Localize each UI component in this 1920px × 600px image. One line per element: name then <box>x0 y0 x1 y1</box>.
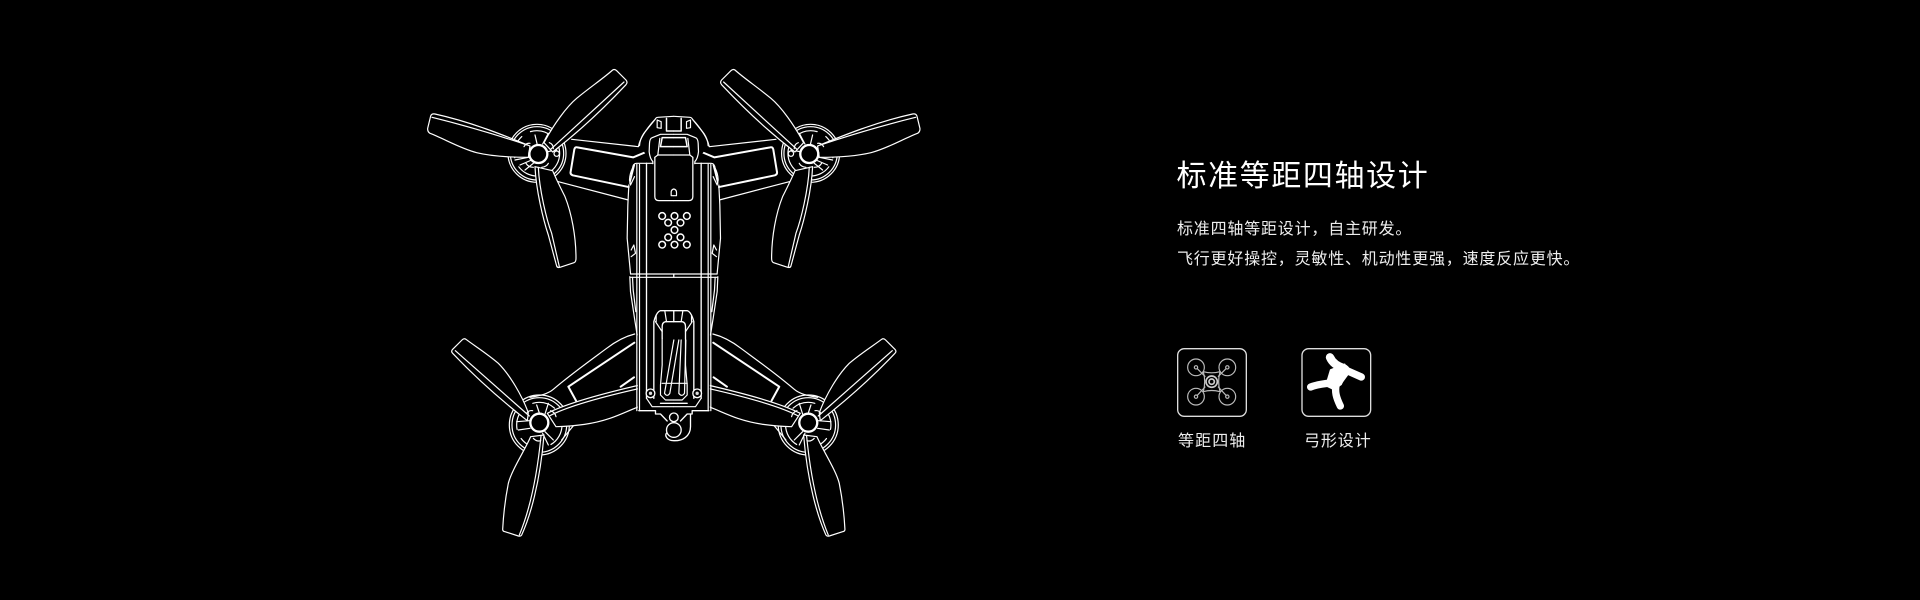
front-right arm and propeller <box>692 69 920 267</box>
label: equidistant quadcopter: 等距四轴 <box>1178 433 1246 450</box>
description line 2: 飞行更好操控，灵敏性、机动性更强，速度反应更快。 <box>1177 250 1580 268</box>
icon: bow-shaped design <box>1302 349 1371 416</box>
rear-left arm and propeller <box>452 334 641 536</box>
front-left arm and propeller <box>428 69 656 267</box>
icon: equidistant quadcopter <box>1178 349 1246 416</box>
title: 标准等距四轴设计 <box>1176 160 1429 192</box>
drone central body <box>627 115 720 442</box>
description line 1: 标准四轴等距设计，自主研发。 <box>1177 220 1412 238</box>
label: bow-shaped design: 弓形设计 <box>1304 433 1372 450</box>
rear-right arm and propeller <box>707 334 896 536</box>
